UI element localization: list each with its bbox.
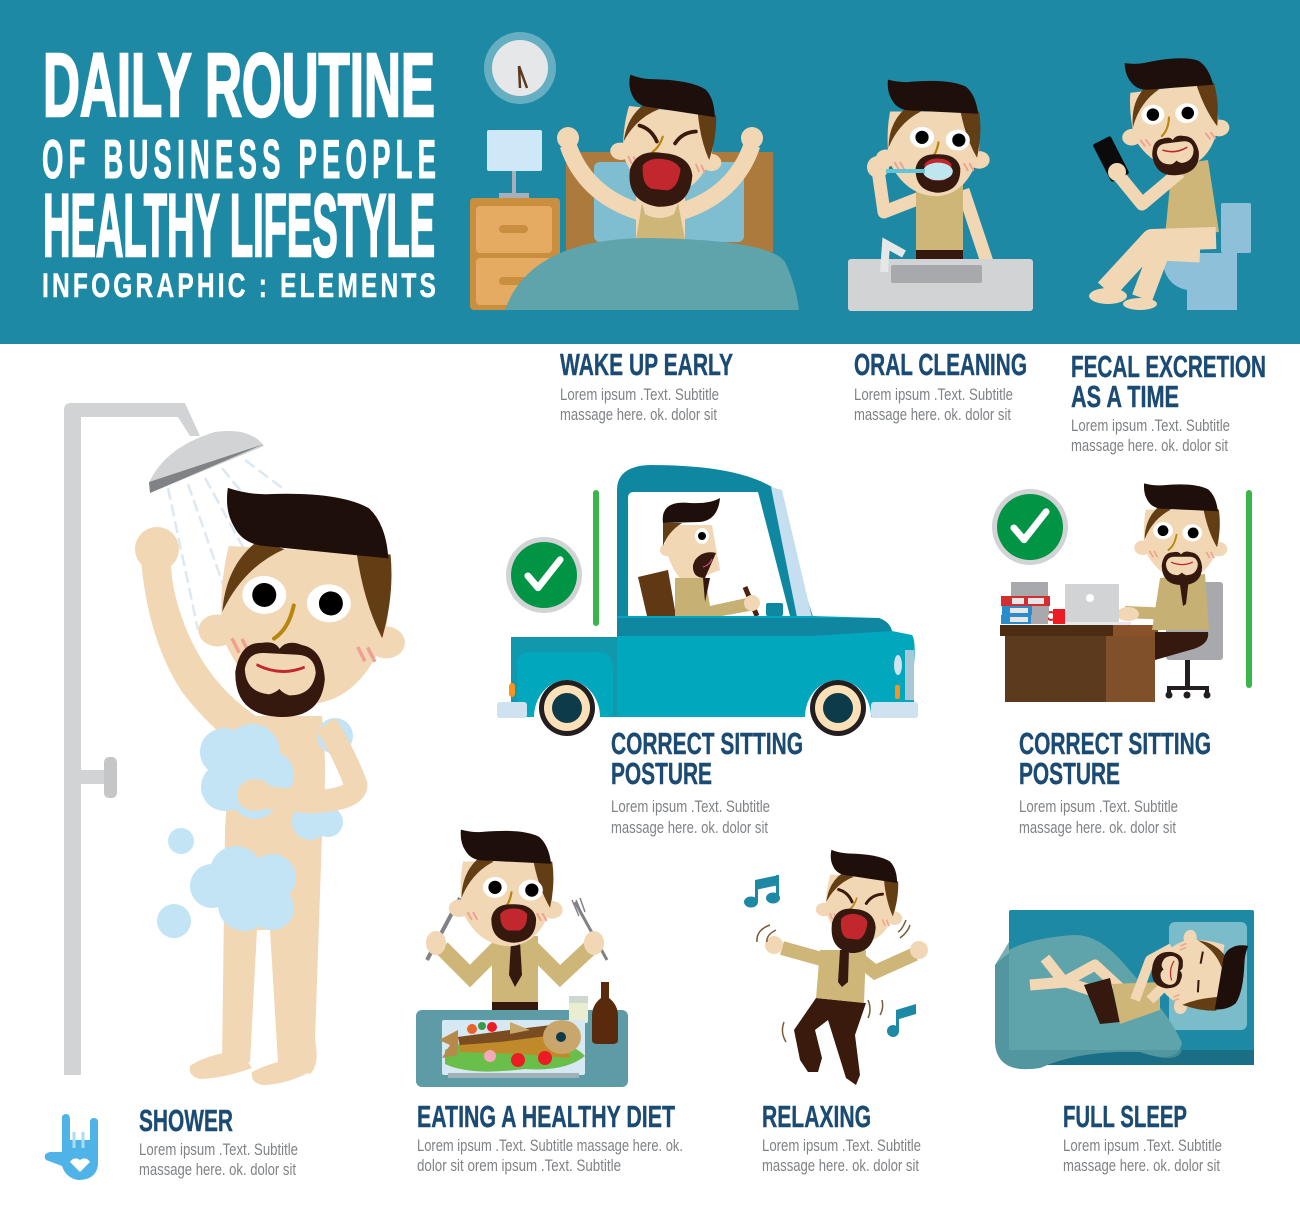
caption: full sleep [1063,1099,1222,1175]
caption: wake up early: massage here. ok. dolor sit [560,405,717,424]
header band [0,0,1300,344]
caption: shower: SHOWER [139,1103,233,1138]
plate with fish [439,1020,585,1078]
man sleeping [1030,926,1249,1024]
foam behind arm [292,718,353,840]
caption: oral cleaning: massage here. ok. dolor sit [854,405,1011,424]
pillow [1169,922,1247,1030]
scene: desk [992,483,1252,702]
drink glass [569,996,588,1023]
driver [638,498,760,620]
head [194,487,413,723]
laptop [1065,584,1131,625]
caption: truck posture: Lorem ipsum .Text. Subtitle [611,797,770,816]
caption: healthy diet: Lorem ipsum .Text. Subtitle massage here. ok. [417,1136,683,1155]
bumpers [497,702,918,718]
wheel: front [805,680,871,736]
icon: hand sign [45,1114,98,1180]
caption: fecal excretion: Lorem ipsum .Text. Subtitle [1071,416,1230,435]
caption: truck posture: POSTURE [611,756,712,791]
caption: full sleep: FULL SLEEP [1063,1099,1187,1134]
bed [1009,910,1254,1065]
icon: check badge [506,537,582,613]
caption: fecal excretion: AS A TIME [1071,379,1179,414]
caption: fecal excretion [1071,349,1266,455]
caption: wake up early: Lorem ipsum .Text. Subtitle [560,385,719,404]
caption: oral cleaning: ORAL CLEANING [854,347,1027,382]
raised arm [141,560,256,740]
caption: truck posture [611,726,803,837]
caption: shower: Lorem ipsum .Text. Subtitle [139,1140,298,1159]
man on toilet [1089,51,1234,310]
icon: double note [744,875,780,908]
caption: relaxing: RELAXING [762,1099,871,1134]
caption: truck posture: massage here. ok. dolor sit [611,818,768,837]
caption: relaxing: massage here. ok. dolor sit [762,1156,919,1175]
caption: relaxing: Lorem ipsum .Text. Subtitle [762,1136,921,1155]
man showering [135,487,413,1085]
desk [1000,625,1158,702]
caption: oral cleaning: Lorem ipsum .Text. Subtitle [854,385,1013,404]
bed headboard [566,152,773,252]
water streams [168,460,285,630]
caption: desk posture: CORRECT SITTING [1019,726,1211,761]
caption: oral cleaning [854,347,1027,424]
shower pole [64,403,200,1075]
caption: desk posture [1019,726,1211,837]
subtitle: infographic elements: INFOGRAPHIC : ELEMENTS [42,267,436,305]
toilet [1162,203,1251,310]
man dancing [757,849,928,1085]
title block [42,36,436,305]
scene: sleeping [995,910,1254,1069]
scene: wake up in bed [470,32,799,310]
caption: shower: massage here. ok. dolor sit [139,1160,296,1179]
icon: nightstand [470,198,560,310]
bubbles [157,828,194,938]
icon: wall clock [484,32,556,104]
truck body [509,616,915,717]
caption: healthy diet [417,1099,683,1175]
man brushing [867,80,990,262]
caption: healthy diet: EATING A HEALTHY DIET [417,1099,675,1134]
green bar [593,490,599,626]
man eating [426,830,607,1011]
man at desk [1117,483,1227,660]
caption: fecal excretion: massage here. ok. dolor sit [1071,436,1228,455]
text: HEALTHY LIFESTYLE [43,175,435,275]
feet [190,1050,310,1085]
sink [848,244,1033,311]
table [416,1010,628,1087]
icon: check badge [992,489,1068,565]
man stretching [557,73,763,240]
blanket [505,238,799,310]
scene: brushing teeth [848,80,1033,311]
title: daily routine: DAILY ROUTINE [43,36,435,136]
book stack [1001,582,1050,624]
icon: single note [887,1004,916,1037]
body [222,716,325,1074]
other arm [250,724,356,802]
caption: wake up early [560,347,733,424]
blanket [995,935,1182,1069]
scene: truck [497,465,918,736]
truck cab [617,465,814,640]
pillow [594,162,744,242]
caption: wake up early: WAKE UP EARLY [560,347,733,382]
caption: full sleep: massage here. ok. dolor sit [1063,1156,1220,1175]
scene: eating [416,830,628,1087]
mug [1047,609,1065,624]
caption: shower [139,1103,298,1179]
bottle [592,982,618,1044]
shower head [149,431,264,493]
scene: relaxing [744,849,928,1085]
scene: shower [64,403,413,1085]
icon: lamp [487,130,542,199]
foam chest [200,724,294,819]
caption: full sleep: Lorem ipsum .Text. Subtitle [1063,1136,1222,1155]
green bar [1246,490,1252,688]
caption: truck posture: CORRECT SITTING [611,726,803,761]
wheel: rear [534,680,600,736]
subtitle: of business people: OF BUSINESS PEOPLE [42,130,436,191]
caption: desk posture: Lorem ipsum .Text. Subtitle [1019,797,1178,816]
caption: desk posture: POSTURE [1019,756,1120,791]
office chair [1166,582,1223,698]
caption: relaxing [762,1099,921,1175]
caption: healthy diet: dolor sit orem ipsum .Text. Subtitle [417,1156,621,1175]
foam lower [190,846,296,931]
caption: desk posture: massage here. ok. dolor sit [1019,818,1176,837]
scene: toilet with phone [1089,51,1251,310]
